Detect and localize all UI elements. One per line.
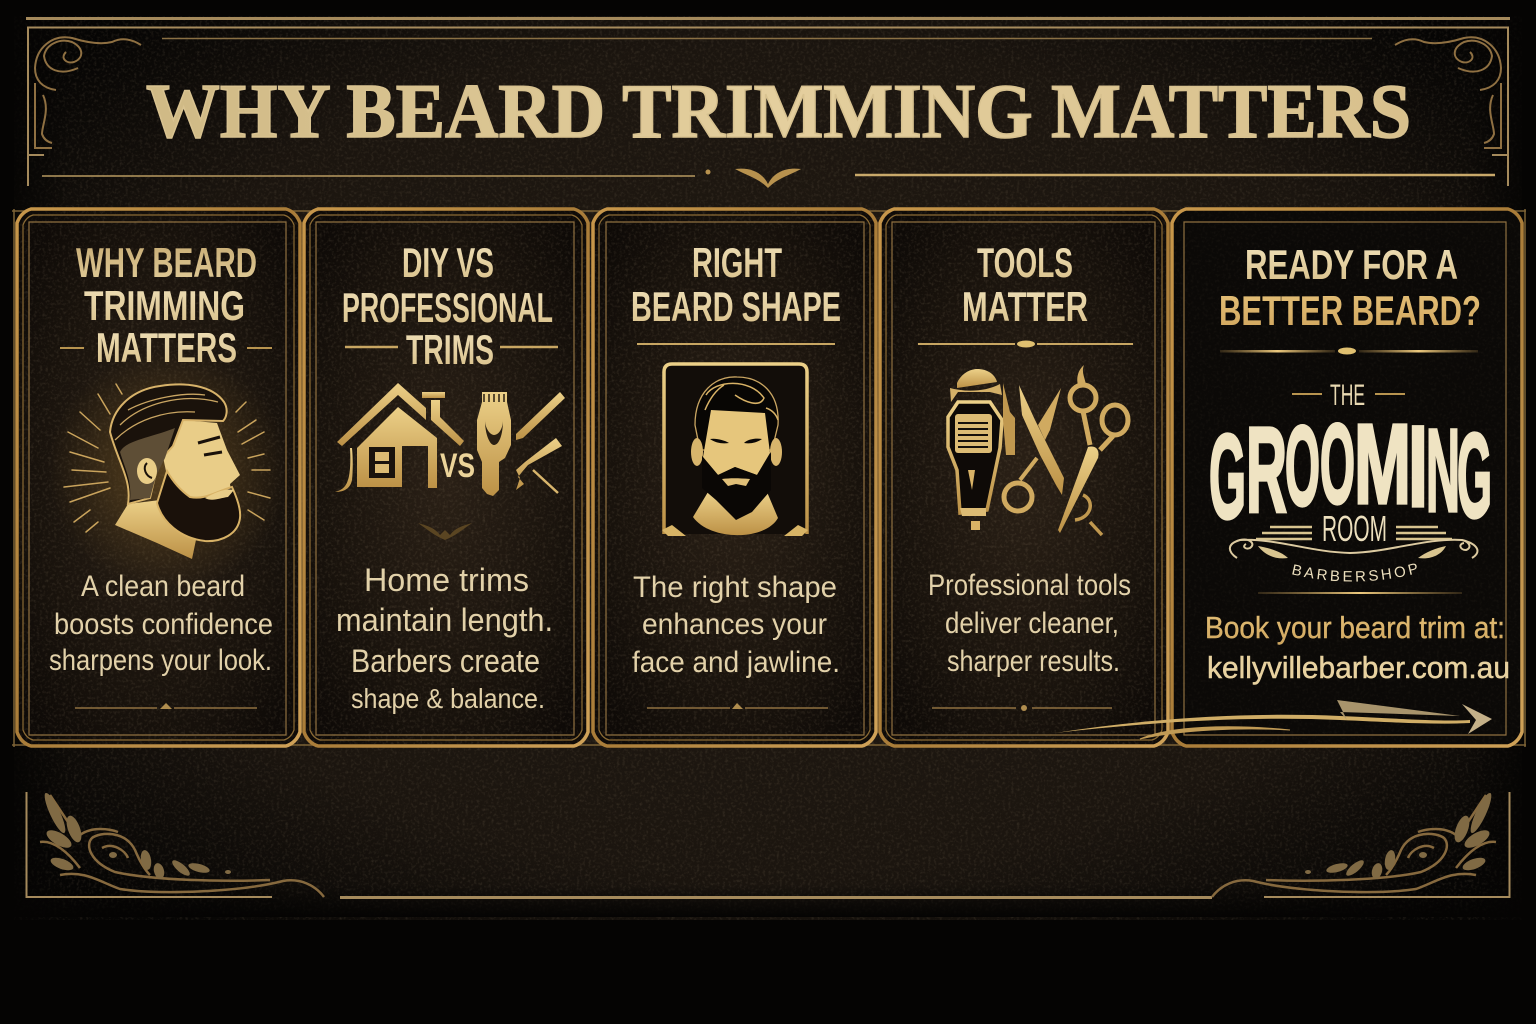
icon: bearded head profile	[64, 384, 270, 559]
card 3 body text: The right shape	[633, 571, 837, 604]
card 5 heading: READY FOR A	[1245, 241, 1458, 288]
panel: card 5 call to action	[1170, 207, 1524, 748]
card 2 body text: shape & balance.	[351, 683, 545, 714]
card 4 body text: Professional tools	[928, 569, 1131, 602]
card 2 body text: Home trims	[364, 562, 529, 598]
card 1 body text: sharpens your look.	[49, 644, 272, 677]
logo: the grooming room barbershop: M	[1354, 401, 1411, 527]
card 4 heading: MATTER	[962, 283, 1088, 330]
logo: the grooming room barbershop: G	[1209, 410, 1246, 544]
logo: the grooming room barbershop	[1209, 379, 1492, 594]
card 3 body text: face and jawline.	[632, 646, 840, 679]
ornament: header centre fleuron	[706, 169, 801, 188]
card 3 body text: enhances your	[642, 608, 827, 641]
card 3 heading: BEARD SHAPE	[631, 283, 841, 330]
booking text: kellyvillebarber.com.au	[1207, 650, 1510, 685]
logo: the grooming room barbershop: N	[1426, 405, 1460, 537]
card 2 heading	[342, 239, 558, 373]
card 1 body text	[49, 570, 273, 677]
logo: the grooming room barbershop: BARBERSHOP	[1292, 564, 1417, 582]
card 3 heading	[631, 239, 841, 344]
ornament: header corner right	[1395, 37, 1501, 148]
arrow	[1055, 700, 1492, 739]
bottom frame	[26, 792, 1510, 898]
logo: the grooming room barbershop: O	[1285, 403, 1320, 529]
card 1 heading: TRIMMING	[84, 282, 245, 329]
card 2 heading: TRIMS	[406, 326, 494, 373]
ornament: header corner left	[35, 37, 141, 148]
card 1 heading: MATTERS	[96, 324, 237, 371]
icon: front-facing bearded man in frame	[662, 364, 808, 536]
card 2 heading: DIY VS	[402, 239, 494, 286]
card 3 body text	[632, 571, 840, 679]
card 2 body text: Barbers create	[351, 643, 540, 679]
panel: card 1 why beard trimming matters	[17, 209, 300, 746]
ornament: bottom left flourish	[40, 791, 324, 897]
card 1 body text: A clean beard	[81, 570, 245, 603]
panel: card 2 diy vs professional trims	[304, 209, 588, 746]
card 2 body text	[336, 562, 553, 714]
card 2 heading: PROFESSIONAL	[342, 284, 553, 331]
panel: card 3 right beard shape	[593, 209, 876, 746]
logo: the grooming room barbershop: THE	[1330, 379, 1365, 412]
card 4 body text: deliver cleaner,	[945, 607, 1119, 640]
logo: the grooming room barbershop: ROOM	[1322, 508, 1387, 549]
card 1 heading	[60, 239, 272, 371]
icon: house versus clippers and razors: VS	[440, 447, 475, 485]
card 1 heading: WHY BEARD	[76, 239, 257, 286]
card outer guide lines	[12, 209, 1526, 747]
card 3 heading: RIGHT	[692, 239, 782, 286]
card 1 body text: boosts confidence	[54, 608, 273, 641]
title: WHY BEARD TRIMMING MATTERS	[146, 68, 1411, 154]
card 4 body text	[928, 569, 1131, 678]
logo: the grooming room barbershop: I	[1408, 403, 1428, 531]
panel: card 4 tools matter	[880, 209, 1168, 746]
header frame	[26, 18, 1510, 186]
booking text	[1205, 610, 1510, 685]
booking text: Book your beard trim at:	[1205, 610, 1505, 645]
card 4 body text: sharper results.	[947, 645, 1120, 678]
card 4 heading: TOOLS	[977, 239, 1073, 286]
logo: the grooming room barbershop: R	[1246, 402, 1287, 538]
logo: the grooming room barbershop: O	[1320, 401, 1355, 527]
icon: clippers and scissors	[948, 365, 1128, 535]
card 4 heading	[918, 239, 1133, 348]
ornament: card 2 small wings	[418, 523, 472, 540]
icon: house versus clippers and razors	[335, 383, 565, 496]
ornament: bottom right flourish	[1212, 791, 1496, 897]
card 2 body text: maintain length.	[336, 602, 553, 638]
card 5 heading	[1219, 241, 1481, 354]
